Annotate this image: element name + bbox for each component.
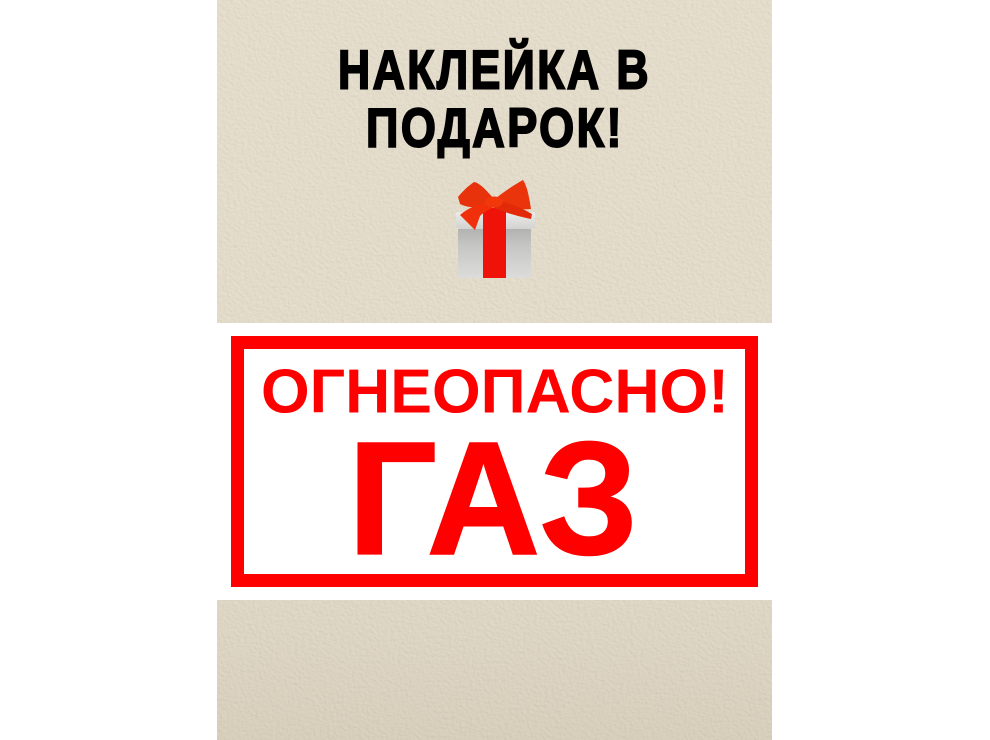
panel: beige textured background <box>217 0 772 740</box>
sign border <box>238 342 752 580</box>
heading: gift sticker <box>338 39 651 158</box>
sign text: gas: ГАЗ <box>348 410 638 589</box>
sign text: flammable: ОГНЕОПАСНО! <box>261 356 729 426</box>
panel: white sign <box>217 323 772 600</box>
heading: gift sticker: НАКЛЕЙКА В <box>338 39 651 100</box>
heading: gift sticker: ПОДАРОК! <box>366 97 624 158</box>
icon: gift box with red bow <box>456 180 535 278</box>
